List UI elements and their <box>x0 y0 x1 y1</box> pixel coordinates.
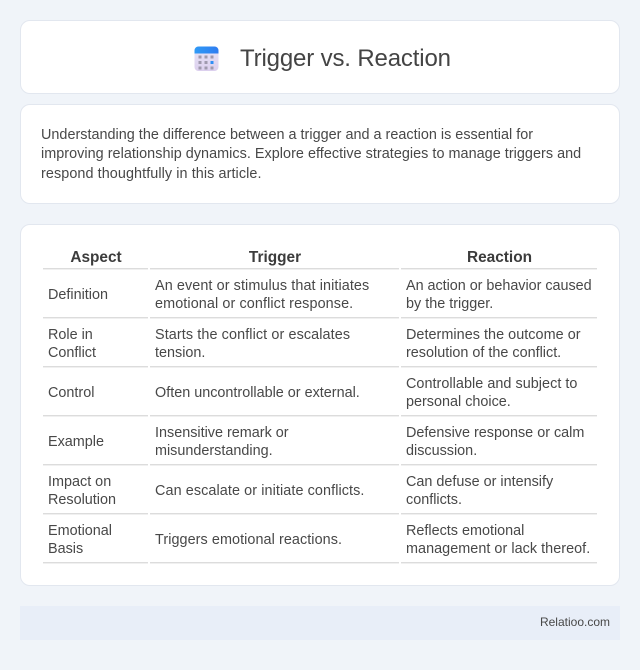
row: Emotional Basis: Emotional <box>48 523 112 539</box>
footer <box>20 606 620 640</box>
panel: comparison table <box>20 224 620 586</box>
row: Role in Conflict: Determines the outcome or <box>406 327 581 343</box>
row: Role in Conflict <box>48 327 581 361</box>
row: Definition <box>48 278 592 312</box>
text block: introduction: Understanding the difference between a trigger and a reaction is essential for <box>41 127 533 143</box>
row: Impact on Resolution <box>48 474 554 508</box>
row: Example: misunderstanding. <box>155 443 273 459</box>
row: Impact on Resolution: conflicts. <box>406 492 462 508</box>
row: Role in Conflict: Conflict <box>48 345 96 361</box>
row: Definition: Definition <box>48 287 108 303</box>
row: Role in Conflict: resolution of the conflict. <box>406 345 561 361</box>
row: Emotional Basis: Triggers emotional reactions. <box>155 532 342 548</box>
row: Impact on Resolution: Resolution <box>48 492 116 508</box>
row: Impact on Resolution: Impact on <box>48 474 111 490</box>
panel: introduction <box>20 104 620 204</box>
row: Example: discussion. <box>406 443 477 459</box>
row: Role in Conflict: Starts the conflict or escalates <box>155 327 350 343</box>
row: Definition: An action or behavior caused <box>406 278 592 294</box>
table header <box>70 249 532 266</box>
row: Impact on Resolution: Can escalate or initiate conflicts. <box>155 483 365 499</box>
text block: introduction: respond thoughtfully in this article. <box>41 166 262 182</box>
row: Control: Often uncontrollable or external. <box>155 385 360 401</box>
row: Control: Controllable and subject to <box>406 376 577 392</box>
icon: calendar <box>194 46 218 71</box>
table header: Reaction <box>467 249 532 266</box>
row: Role in Conflict: tension. <box>155 345 205 361</box>
row: Definition: emotional or conflict response. <box>155 296 353 312</box>
row: Emotional Basis: Basis <box>48 541 83 557</box>
row: Emotional Basis: Reflects emotional <box>406 523 524 539</box>
row: Definition: by the trigger. <box>406 296 493 312</box>
row: Control <box>48 376 577 410</box>
row: Example: Example <box>48 434 104 450</box>
row: Emotional Basis <box>48 523 590 557</box>
row: Example: Insensitive remark or <box>155 425 289 441</box>
row: Example <box>48 425 584 459</box>
row: Control: Control <box>48 385 94 401</box>
footer text: Relatioo.com <box>540 615 610 629</box>
table header: Trigger <box>249 249 301 266</box>
row: Control: personal choice. <box>406 394 511 410</box>
title: Trigger vs. Reaction <box>240 45 451 72</box>
row: Emotional Basis: management or lack thereof. <box>406 541 590 557</box>
text block: introduction <box>41 127 581 182</box>
row: Role in Conflict: Role in <box>48 327 93 343</box>
text block: introduction: improving relationship dynamics. Explore effective strategies to manage triggers and <box>41 146 581 162</box>
row: Definition: An event or stimulus that initiates <box>155 278 369 294</box>
panel: header <box>20 20 620 94</box>
row: Example: Defensive response or calm <box>406 425 584 441</box>
table header: Aspect <box>70 249 122 266</box>
row: Impact on Resolution: Can defuse or intensify <box>406 474 553 490</box>
